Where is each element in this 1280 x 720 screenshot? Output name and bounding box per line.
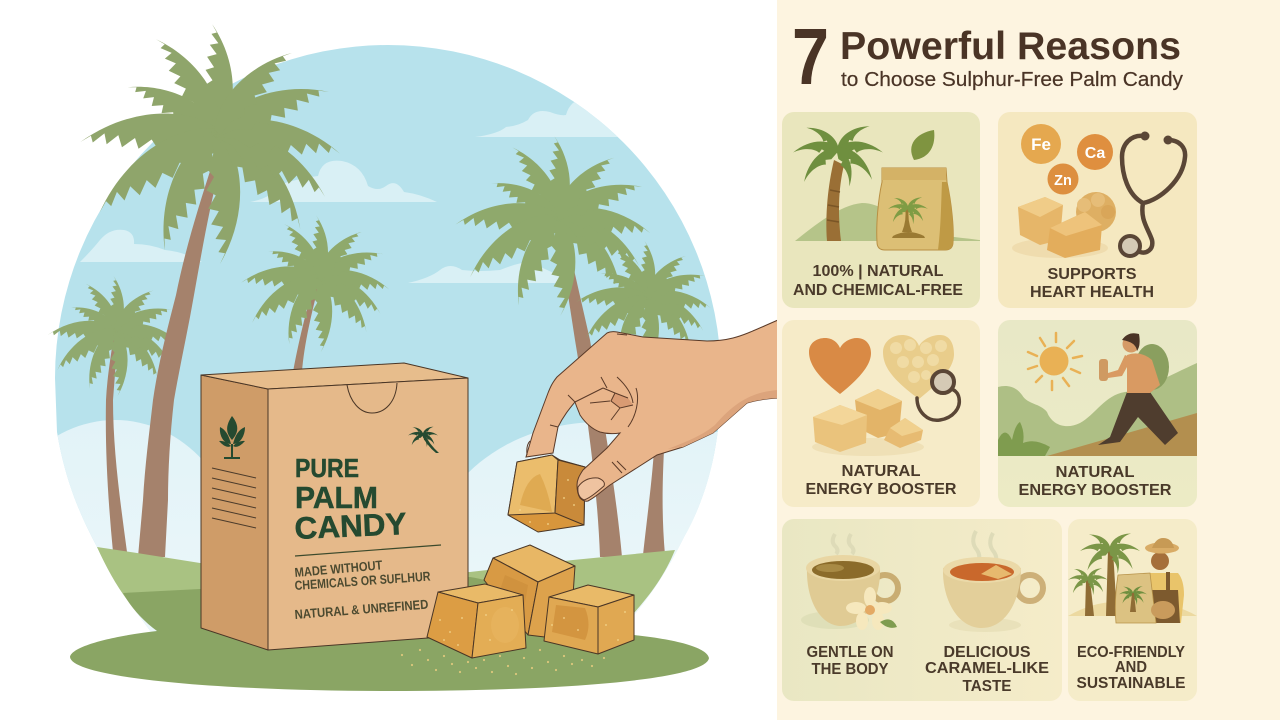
label: 100% | NATURAL <box>812 263 944 280</box>
box subtitle <box>294 557 431 622</box>
sand ground <box>1068 602 1197 616</box>
icon: nugget heart <box>883 335 954 399</box>
side text lines <box>212 468 256 528</box>
hand shadow <box>668 390 778 449</box>
front palm icon <box>408 424 439 453</box>
label: NATURAL <box>842 463 921 480</box>
label: gentle on the body: GENTLE ON <box>806 644 894 661</box>
label <box>793 263 963 299</box>
label <box>1018 464 1172 499</box>
icon: cup with flower <box>801 534 898 630</box>
card: gentle on the body and caramel taste <box>782 519 1062 701</box>
icon: stethoscope <box>1120 132 1185 256</box>
hill <box>795 203 985 241</box>
icon: leaf <box>911 130 934 160</box>
label: SUSTAINABLE <box>1076 675 1186 692</box>
icon: farmer <box>1145 538 1184 623</box>
palm tree: far right <box>575 240 713 555</box>
palm tree: tall <box>79 23 344 557</box>
side leaf icon <box>219 416 245 459</box>
palm tree: centre <box>240 215 391 372</box>
card: natural energy booster (hiker) <box>998 320 1197 507</box>
label: ENERGY BOOSTER <box>806 481 957 498</box>
flower <box>846 587 897 630</box>
brown slope <box>1047 413 1197 456</box>
big number 7: 7 <box>792 12 829 101</box>
card: natural and chemical-free <box>782 112 985 308</box>
card: supports heart health (minerals) <box>998 112 1197 308</box>
label: caramel-like taste <box>925 644 1049 695</box>
subheading: to Choose Sulphur-Free Palm Candy <box>841 69 1183 91</box>
card: natural energy booster (hearts) <box>782 320 980 507</box>
box subtitle: MADE WITHOUT <box>294 557 383 580</box>
palm candy cube: back <box>484 545 575 640</box>
dark green ground <box>70 577 709 691</box>
icon: palm tree <box>793 119 883 241</box>
icon: orange heart <box>809 338 871 394</box>
label: HEART HEALTH <box>1030 284 1154 301</box>
box subtitle: NATURAL & UNREFINED <box>294 597 429 622</box>
panel: tropical scene illustration <box>0 23 778 700</box>
label: gentle on the body: THE BODY <box>812 661 889 678</box>
label: ENERGY BOOSTER <box>1018 482 1172 499</box>
icon: sun <box>1028 333 1082 390</box>
panel: right reasons column <box>777 0 1280 720</box>
pale hills on horizon <box>58 420 718 632</box>
label: SUPPORTS <box>1048 266 1137 283</box>
palm candy cube: front left <box>427 584 526 658</box>
green hills <box>998 363 1197 456</box>
palm tree: right tall <box>454 135 653 557</box>
thumbnail <box>578 478 604 500</box>
finger curl <box>611 393 633 408</box>
title <box>792 12 1183 101</box>
icon: palm trees <box>1068 529 1140 616</box>
hand pinching candy <box>526 320 778 501</box>
bush <box>998 422 1050 456</box>
box title: PALM <box>295 480 378 515</box>
heading: Powerful Reasons <box>840 25 1181 68</box>
label: gentle on the body <box>806 644 894 678</box>
box title: PURE <box>295 453 359 483</box>
sky circle <box>55 45 721 640</box>
label: AND <box>1115 659 1147 676</box>
label: NATURAL <box>1056 464 1135 481</box>
box top <box>201 363 468 389</box>
box side <box>201 375 268 650</box>
icon: product bag <box>1115 573 1175 623</box>
icon: candy cubes <box>1012 192 1116 258</box>
label: caramel-like taste: DELICIOUS <box>944 644 1031 661</box>
label: caramel-like taste: CARAMEL-LIKE <box>925 660 1049 677</box>
box title <box>294 453 408 546</box>
box title: CANDY <box>294 506 408 546</box>
label: ECO-FRIENDLY <box>1077 644 1185 661</box>
clouds <box>80 98 620 283</box>
icon: mineral badges: Fe <box>1031 135 1051 154</box>
light green ground <box>97 547 675 650</box>
box subtitle: CHEMICALS OR SUFLHUR <box>294 569 431 593</box>
icon: stethoscope ring <box>917 371 959 420</box>
icon: mineral badges: Zn <box>1054 173 1072 189</box>
card: eco-friendly and sustainable <box>1068 519 1197 701</box>
knuckle lines <box>527 334 627 473</box>
label <box>806 463 957 498</box>
sugar crumbs <box>401 649 605 675</box>
label <box>1030 266 1154 301</box>
label: AND CHEMICAL-FREE <box>793 282 963 299</box>
palm candy cube: front right <box>544 585 634 654</box>
icon: mineral badges: Ca <box>1085 145 1105 162</box>
icon: mineral badges <box>1021 124 1113 194</box>
product box <box>201 363 468 650</box>
icon: cup with candy <box>943 531 1043 632</box>
icon: hiker <box>1098 333 1178 445</box>
box front <box>268 378 468 650</box>
palm tree: far left <box>47 276 179 552</box>
box notch <box>347 383 397 413</box>
icon: candy cubes <box>812 389 924 456</box>
palm candy cube: held <box>508 455 585 532</box>
label: caramel-like taste: TASTE <box>962 678 1012 695</box>
icon: paper bag <box>877 168 953 250</box>
label <box>1076 644 1186 692</box>
